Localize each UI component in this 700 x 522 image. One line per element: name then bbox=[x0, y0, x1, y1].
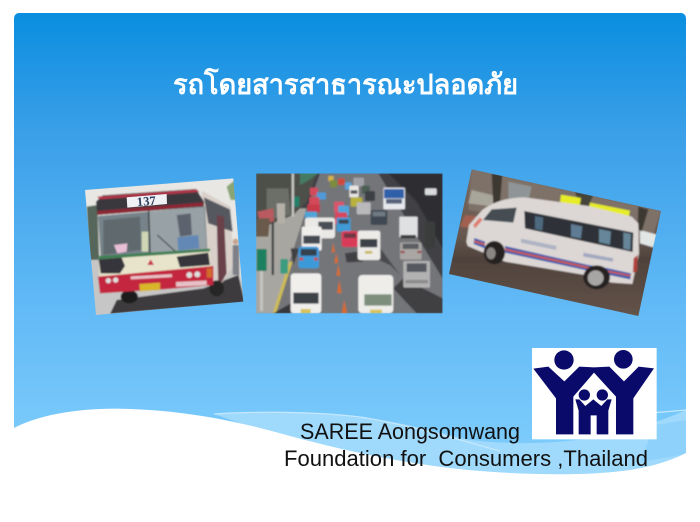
child figures bbox=[575, 389, 612, 434]
roof band bbox=[96, 189, 204, 215]
building backdrop bbox=[468, 176, 660, 238]
organisation name: Foundation for Consumers ,Thailand bbox=[284, 446, 648, 471]
door markings bbox=[521, 239, 557, 250]
title: รถโดยสารสาธารณะปลอดภัย bbox=[173, 67, 518, 101]
wheels bbox=[121, 290, 138, 303]
grey car bbox=[400, 242, 422, 260]
van body bbox=[466, 197, 639, 284]
lights bbox=[473, 217, 482, 228]
shadows bbox=[393, 278, 443, 313]
stripes bbox=[474, 238, 485, 248]
bus side bbox=[202, 191, 233, 291]
wheels bbox=[484, 241, 505, 264]
trees bbox=[492, 173, 502, 206]
red bumper bbox=[98, 266, 213, 293]
traffic cones bbox=[332, 242, 335, 252]
logo: family in house bbox=[532, 348, 657, 439]
sidewalk bbox=[256, 208, 307, 313]
street furniture bbox=[257, 249, 267, 271]
big white van bbox=[305, 218, 335, 238]
cars rear rows bbox=[328, 176, 334, 181]
windshield bbox=[98, 207, 207, 257]
light wave band bbox=[214, 410, 686, 480]
white wave bbox=[0, 409, 686, 522]
yellow sign bbox=[560, 195, 581, 206]
road bbox=[273, 173, 443, 313]
lamp pods bbox=[99, 258, 125, 273]
destination sign bbox=[127, 194, 167, 209]
blue car bbox=[298, 247, 319, 268]
bus bbox=[383, 188, 405, 209]
red car bbox=[342, 231, 358, 247]
white van front right bbox=[358, 275, 393, 313]
white truck bbox=[399, 217, 418, 237]
presenter name: SAREE Aongsomwang bbox=[300, 419, 520, 444]
white van bbox=[302, 227, 322, 251]
photo: city bus bbox=[85, 178, 244, 315]
white van center bbox=[358, 231, 380, 260]
destination sign: 137 bbox=[136, 194, 157, 209]
pickup bbox=[403, 261, 430, 288]
photo: traffic on a city road bbox=[256, 173, 443, 313]
photo: white passenger van bbox=[445, 167, 670, 320]
large figures silhouette bbox=[533, 367, 654, 434]
cream panel bbox=[99, 249, 211, 277]
white van front left bbox=[291, 273, 321, 313]
